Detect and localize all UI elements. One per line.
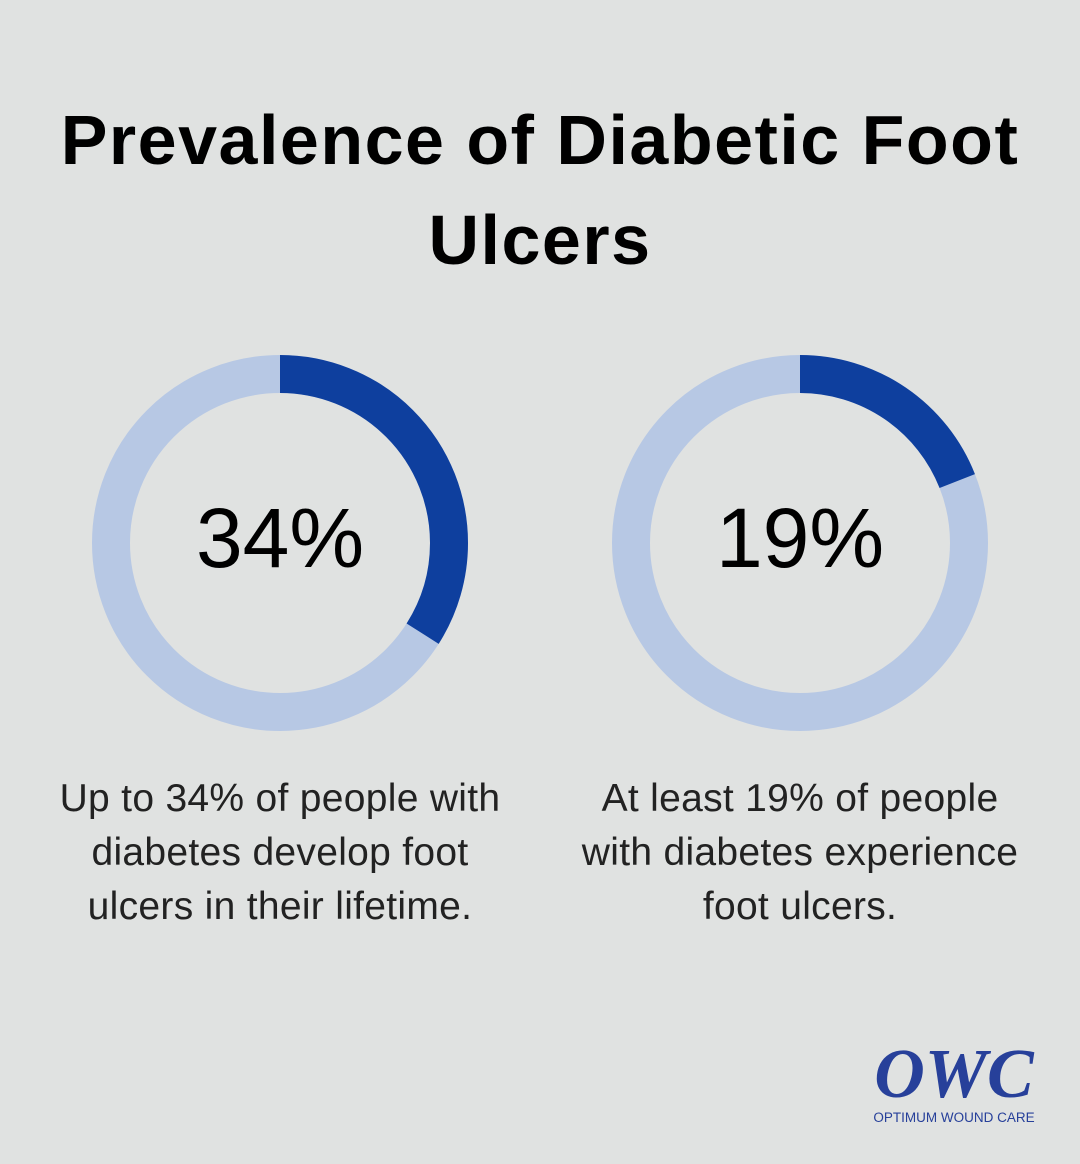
- title: Prevalence of Diabetic Foot: [61, 101, 1019, 179]
- text: 34% description: Up to 34% of people with: [60, 777, 500, 820]
- donut charts: [92, 355, 988, 731]
- text: 19% description: with diabetes experience: [582, 831, 1018, 874]
- text: 19% description: [582, 777, 1018, 928]
- text: 34% description: ulcers in their lifetime.: [88, 885, 472, 928]
- number: 19%: 19%: [716, 491, 884, 585]
- logo: OWC: [874, 1036, 1034, 1113]
- text: 34% description: [60, 777, 500, 928]
- number: 34%: 34%: [196, 491, 364, 585]
- text: 19% description: At least 19% of people: [602, 777, 998, 820]
- title: [61, 101, 1019, 279]
- logo: OPTIMUM WOUND CARE: [873, 1110, 1035, 1125]
- title: Ulcers: [428, 201, 652, 279]
- text: 19% description: foot ulcers.: [703, 885, 897, 928]
- text: 34% description: diabetes develop foot: [91, 831, 469, 874]
